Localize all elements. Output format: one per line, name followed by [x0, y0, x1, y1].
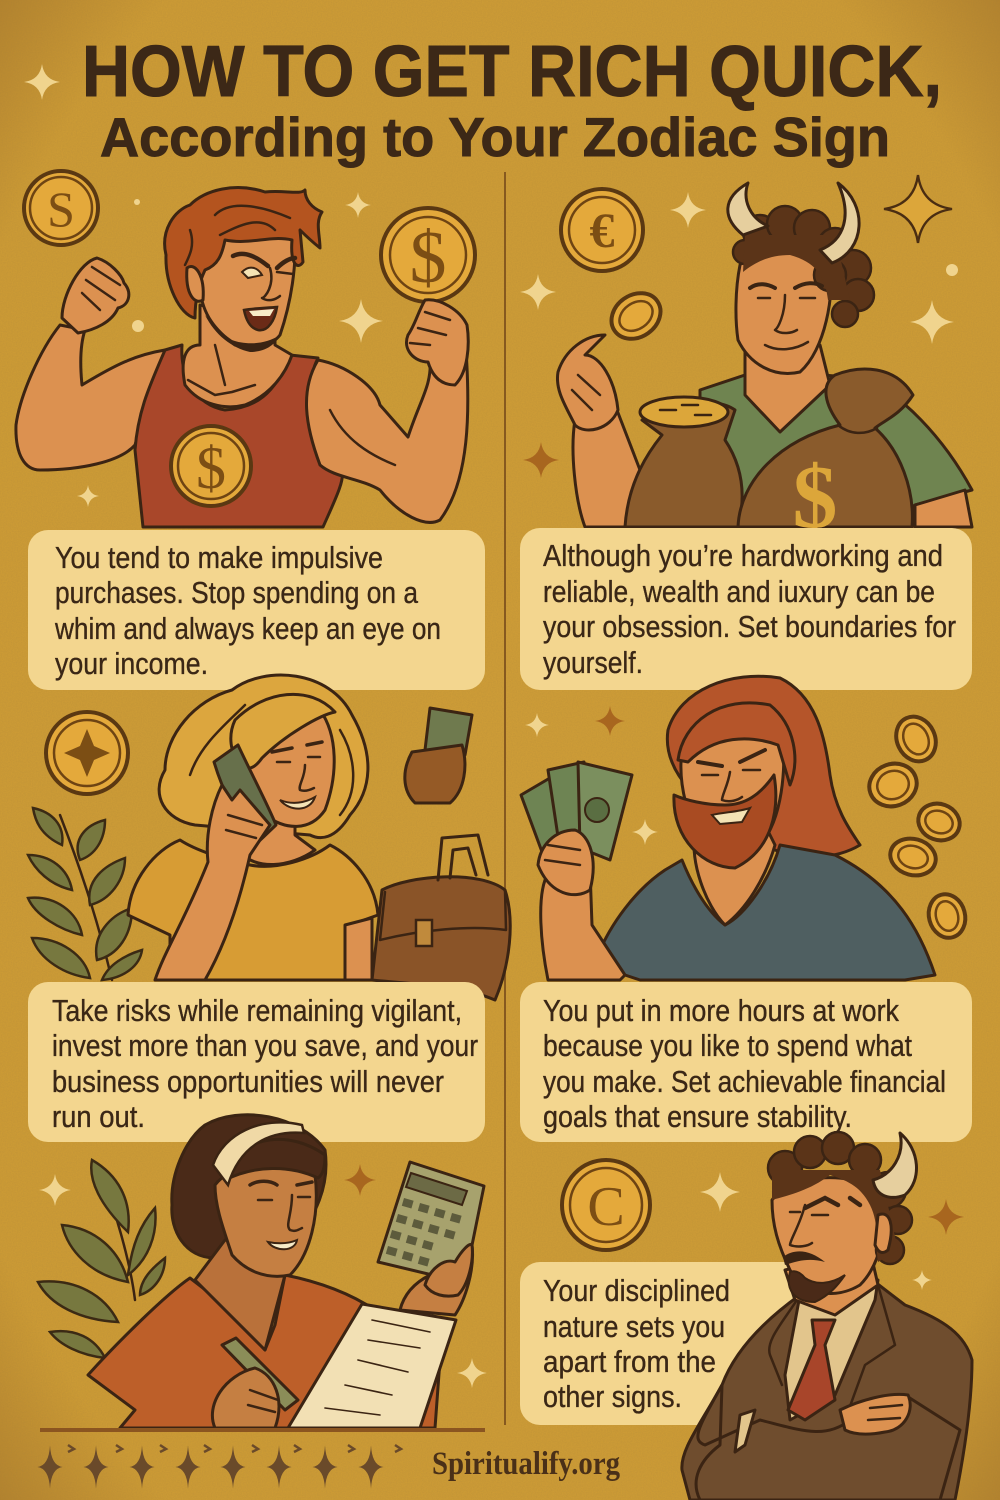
chest coin [171, 426, 251, 506]
face [736, 244, 831, 373]
illustration: Aries man flexing with coin [16, 188, 475, 527]
beard [674, 775, 776, 868]
illustration: Capricorn man in suit [682, 1132, 972, 1500]
face [200, 230, 295, 348]
text box: Gemini [28, 982, 485, 1142]
coin: euro: € [590, 202, 614, 258]
face [772, 1178, 884, 1293]
text box: Taurus: Although you’re hardworking and [543, 538, 943, 573]
text box: Gemini: invest more than you save, and your [52, 1028, 478, 1063]
text box: Aries [28, 530, 485, 690]
flipping hand [557, 335, 618, 430]
phone hand and arm [155, 785, 270, 980]
left money bag [625, 402, 742, 527]
plant: Virgo leaves [38, 1160, 165, 1358]
column divider [504, 172, 506, 1425]
plant: left leaves [28, 808, 142, 980]
eyes, nose, smile [250, 1181, 312, 1185]
brown bag [372, 877, 510, 1000]
neck [785, 1250, 878, 1315]
ear [187, 267, 203, 301]
neck [240, 805, 315, 865]
slate t-shirt [598, 845, 935, 980]
phone [214, 745, 276, 845]
text box: Leo: You put in more hours at work [543, 993, 899, 1028]
gripping hand [406, 300, 468, 385]
eyes and mouth [272, 742, 322, 752]
text box: Gemini: run out. [52, 1099, 145, 1134]
arm [541, 870, 625, 980]
yellow t-shirt [128, 840, 378, 980]
jaw shadow [205, 315, 280, 352]
footer brand: Spiritualify.org [432, 1446, 620, 1482]
green t-shirt [700, 370, 972, 527]
suit jacket [682, 1282, 972, 1500]
illustration: Aries man flexing with coin: $ [196, 435, 226, 501]
face [245, 710, 334, 826]
footer sparkle row [37, 1445, 401, 1489]
raised left arm [16, 325, 165, 470]
face [681, 723, 784, 845]
illustration: Taurus man with money bags [557, 183, 972, 547]
text box: Leo: goals that ensure stability. [543, 1099, 852, 1134]
ear [875, 1214, 891, 1252]
text box: Gemini: Take risks while remaining vigilant, [52, 993, 462, 1028]
moustache and goatee [783, 1251, 825, 1265]
coin: C [562, 1160, 650, 1250]
text box: Aries: your income. [55, 646, 208, 681]
text box: Capricorn: Your disciplined [543, 1273, 730, 1308]
shirt [785, 1280, 878, 1420]
open mouth [244, 307, 277, 330]
text box: Taurus: yourself. [543, 645, 643, 680]
paper [288, 1304, 456, 1428]
calculator raised arm [400, 1244, 473, 1315]
coin: flipped coin [603, 284, 669, 348]
neck and chest [183, 305, 292, 407]
icon: large gold star [884, 175, 952, 243]
eyes and brows [233, 254, 295, 268]
face [215, 1166, 316, 1276]
neck [195, 1240, 285, 1350]
horn [873, 1133, 916, 1197]
lapels [769, 1285, 895, 1420]
coins: Leo stack [863, 710, 970, 942]
orange blouse [88, 1275, 440, 1428]
tank top [135, 345, 343, 527]
text box: Taurus: reliable, wealth and iuxury can be [543, 574, 935, 609]
coin: C: C [587, 1176, 625, 1238]
right money bag [738, 369, 913, 527]
right forearm [915, 490, 972, 527]
blonde hair back [159, 675, 368, 838]
neck [694, 825, 775, 925]
ground line [40, 1428, 485, 1432]
cash fan [521, 775, 570, 860]
calculator [378, 1162, 484, 1278]
title: According to Your Zodiac Sign [100, 106, 890, 168]
text box: Capricorn: nature sets you [543, 1309, 725, 1344]
text box: Capricorn: apart from the [543, 1344, 716, 1379]
curly hair [733, 206, 874, 327]
arm raised [573, 405, 640, 527]
text box: Aries: whim and always keep an eye on [54, 611, 441, 646]
title: HOW TO GET RICH QUICK, [82, 32, 942, 112]
calculator fingers [425, 1244, 472, 1296]
text box: Aries: purchases. Stop spending on a [55, 575, 419, 610]
facial features [750, 283, 822, 288]
illustration: Virgo woman with calculator [40, 1115, 485, 1430]
coin: euro [561, 189, 643, 271]
curly hair [768, 1132, 912, 1264]
writing hand and pencil [222, 1338, 298, 1410]
coin: star [46, 712, 128, 794]
text box: Gemini: business opportunities will never [52, 1064, 444, 1099]
tie [788, 1320, 835, 1420]
held coin [381, 208, 475, 302]
right arm [306, 350, 468, 522]
text box: Leo [520, 982, 972, 1142]
neck [745, 340, 830, 432]
hand [840, 1394, 910, 1434]
illustration: Aries man flexing with coin: $ [410, 217, 446, 299]
dark hair [172, 1115, 326, 1258]
coin: S top left [24, 171, 98, 245]
blonde fringe [231, 694, 335, 768]
illustration: Taurus man with money bags: $ [792, 448, 838, 547]
fist [62, 258, 129, 333]
hair [165, 188, 322, 318]
cuff [735, 1410, 755, 1452]
horns [728, 183, 768, 235]
red hair back [667, 676, 860, 857]
right arm [345, 918, 372, 980]
text box: Capricorn: other signs. [543, 1379, 682, 1414]
eyes and nose [698, 750, 765, 766]
small pouch with cash [425, 708, 472, 755]
text box: Leo: because you like to spend what [543, 1028, 912, 1063]
crossed arms [696, 1385, 960, 1500]
red hair fringe [678, 703, 795, 785]
cash hand [538, 830, 593, 895]
title [82, 32, 942, 168]
hair front and headband [225, 1139, 325, 1180]
text box: Taurus [520, 528, 972, 690]
illustration: Leo man with cash [521, 676, 935, 980]
brows, eyes, nose [805, 1198, 860, 1208]
text box: Capricorn [520, 1262, 805, 1425]
text box: Aries: You tend to make impulsive [55, 540, 383, 575]
coin: S top left: S [47, 181, 75, 237]
illustration: Gemini woman on phone [128, 675, 510, 1000]
